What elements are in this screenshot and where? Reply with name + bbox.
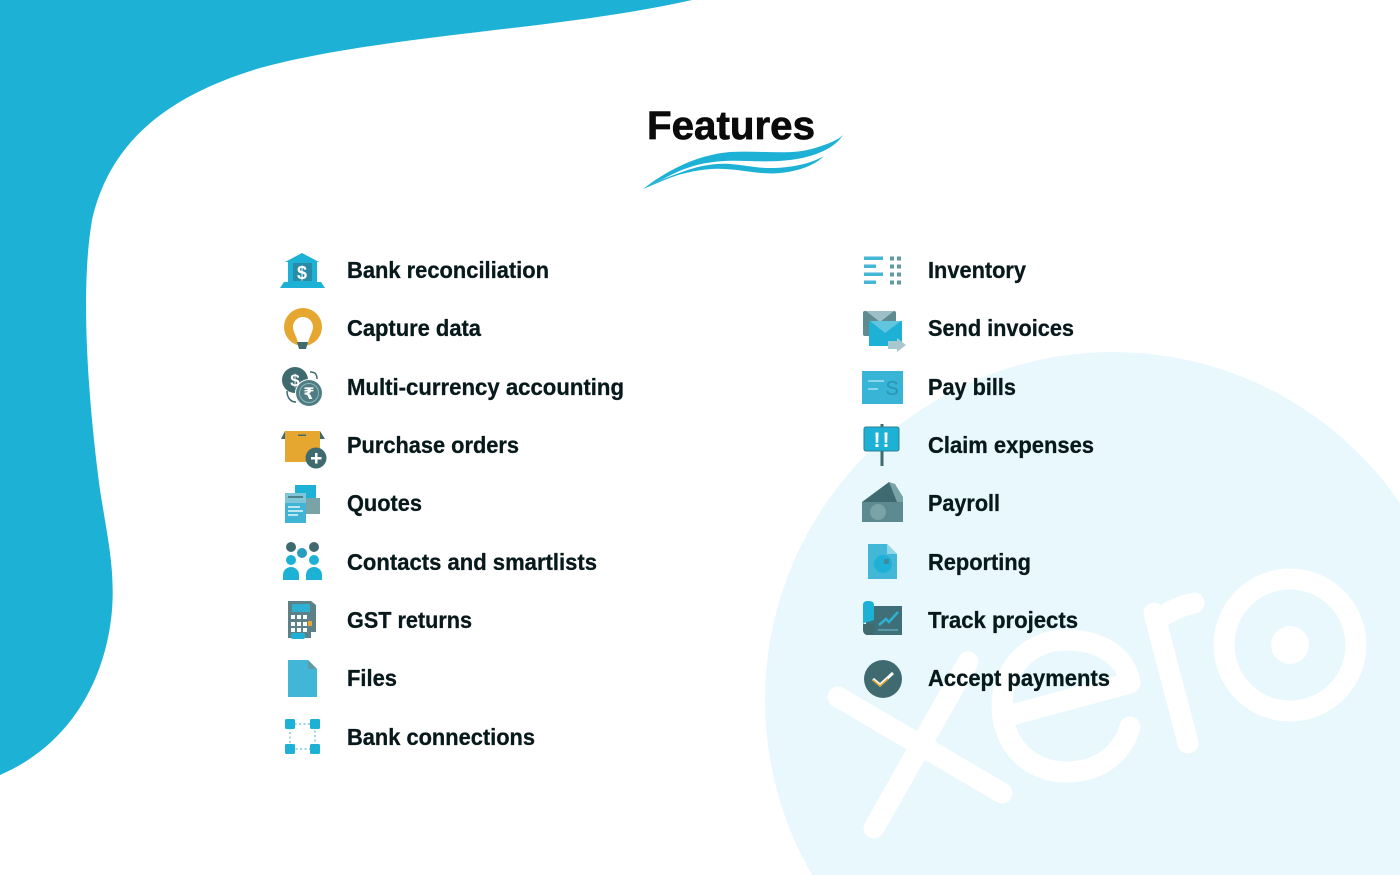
icon: connections (285, 719, 320, 754)
label: GST returns: GST returns (347, 607, 472, 633)
label: Accept payments: Accept payments (928, 665, 1110, 691)
icon: currency exchange: ₹ (303, 384, 315, 403)
icon: contacts (283, 542, 322, 580)
icon: payroll cash (862, 482, 903, 522)
label: Contacts and smartlists: Contacts and smartlists (347, 549, 597, 575)
icon: send invoice envelope (863, 311, 906, 352)
label: Bank reconciliation: Bank reconciliation (347, 257, 549, 283)
label: Pay bills: Pay bills (928, 374, 1016, 400)
icon: light bulb (284, 308, 322, 349)
title: Features (647, 104, 815, 148)
icon: verified check badge (864, 660, 902, 698)
icon: alert sign: ! (882, 429, 890, 452)
icon: bill (862, 371, 903, 404)
label: Track projects: Track projects (928, 607, 1078, 633)
icon: box with plus (281, 431, 326, 468)
watermark: xero logo (838, 579, 1356, 828)
icon: bank: $ (297, 263, 307, 283)
label: Reporting: Reporting (928, 549, 1031, 575)
label: Payroll: Payroll (928, 490, 1000, 516)
icon: currency exchange (282, 367, 323, 407)
label: Send invoices: Send invoices (928, 315, 1074, 341)
label: Claim expenses: Claim expenses (928, 432, 1094, 458)
label: Multi-currency accounting: Multi-currency accounting (347, 374, 624, 400)
icon: calculator (288, 601, 316, 639)
icon: file (288, 660, 317, 697)
label: Capture data: Capture data (347, 315, 482, 341)
label: Purchase orders: Purchase orders (347, 432, 519, 458)
icon: track project scroll (863, 601, 902, 635)
icon: report document (868, 544, 897, 579)
icon: bill: S (885, 378, 899, 400)
background: pale circle (765, 352, 1400, 875)
background: blue corner blob (0, 0, 692, 775)
label: Bank connections: Bank connections (347, 724, 535, 750)
icon: alert sign (864, 424, 899, 466)
icon: alert sign: ! (874, 429, 880, 452)
title swoosh (643, 135, 843, 189)
label: Files: Files (347, 665, 397, 691)
icon: bank (280, 253, 325, 288)
label: Inventory: Inventory (928, 257, 1026, 283)
icon: currency exchange: $ (290, 371, 300, 390)
icon: inventory list (864, 256, 901, 284)
icon: quote documents (285, 485, 320, 523)
label: Quotes: Quotes (347, 490, 422, 516)
